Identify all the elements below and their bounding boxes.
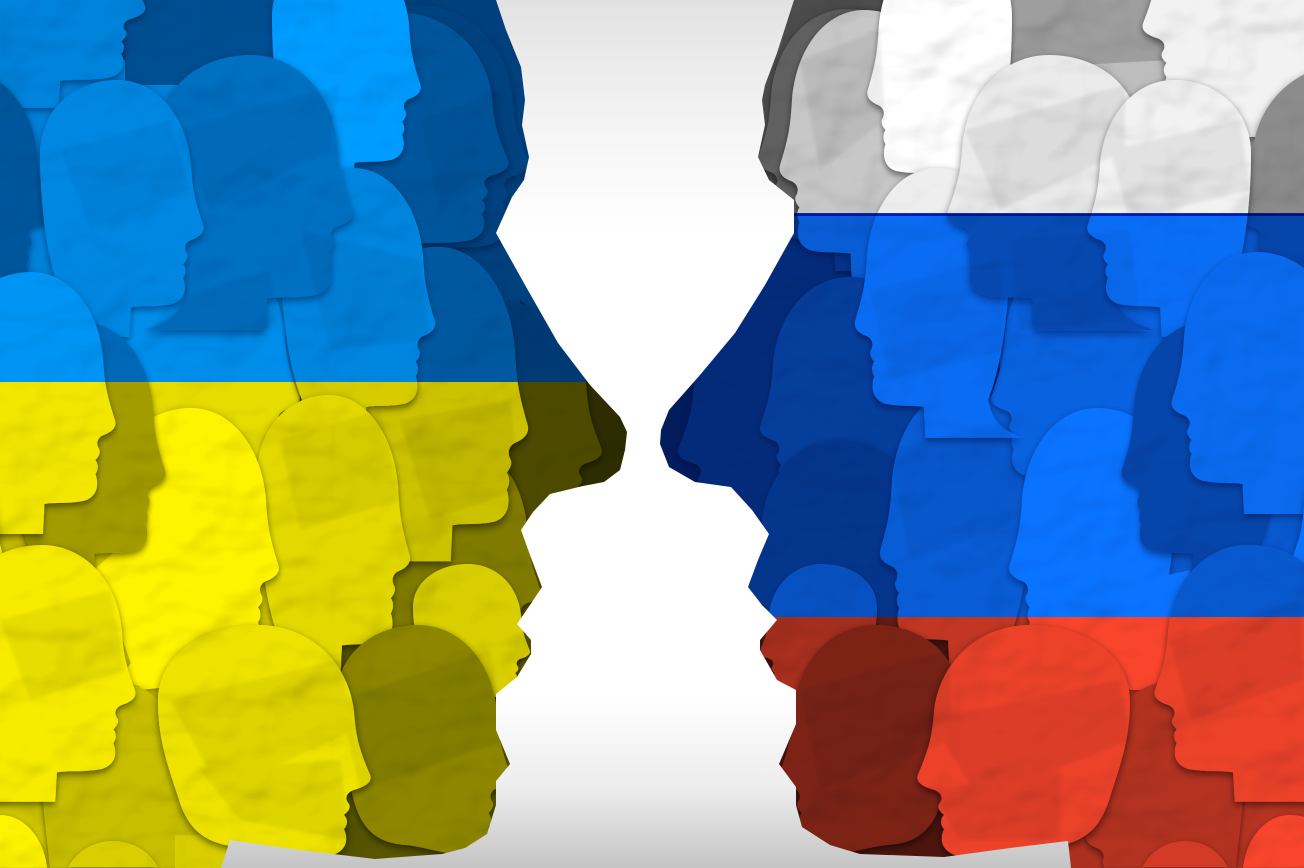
panel: Ukraine flag crowd of paper heads facing right — [0, 0, 640, 868]
panel: Russia flag crowd of paper heads facing left — [650, 0, 1304, 868]
paper creases on the Russia heads — [800, 30, 1304, 840]
paper creases on the Ukraine heads — [0, 85, 520, 840]
